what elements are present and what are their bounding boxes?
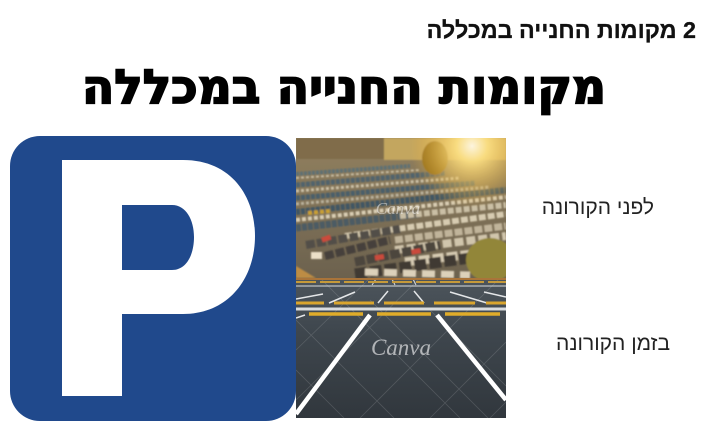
icon: parking sign <box>10 136 296 421</box>
photo: full parking lot <box>296 138 506 278</box>
title: מקומות החנייה במכללה <box>82 60 606 115</box>
watermark: Canva <box>371 335 431 360</box>
label: before corona: לפני הקורונה <box>542 196 654 219</box>
parking lines <box>296 279 506 414</box>
subtitle: 2 מקומות החנייה במכללה <box>427 17 696 43</box>
photo: empty parking lot <box>296 278 506 418</box>
label: during corona: בזמן הקורונה <box>556 332 670 355</box>
watermark: Canva <box>376 199 420 218</box>
